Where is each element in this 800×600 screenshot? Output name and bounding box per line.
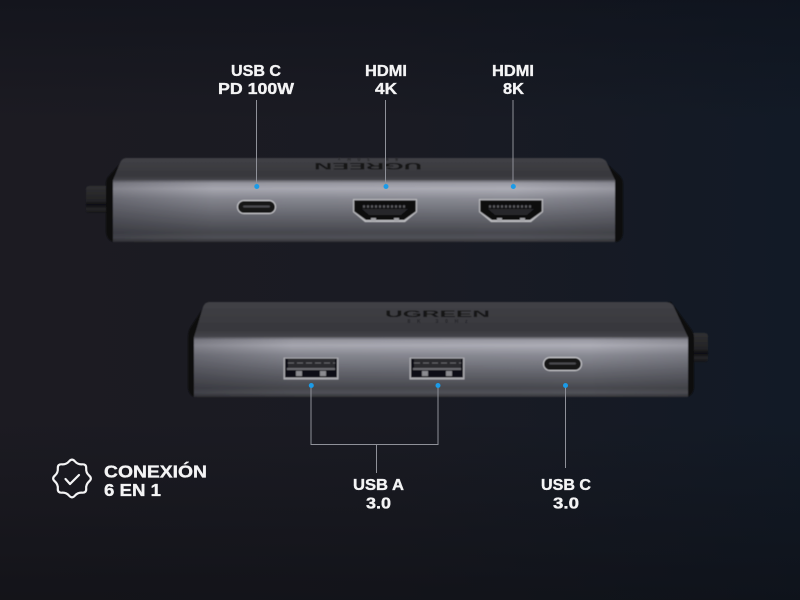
port: USB C 3.0 [544, 358, 582, 370]
callout: HDMI 8K: HDMI [492, 63, 534, 80]
callout: USB C PD 100W [218, 63, 294, 189]
callout: HDMI 4K: 4K [375, 81, 398, 98]
callout: USB C PD 100W: PD 100W [218, 81, 294, 98]
callout: HDMI 8K: 8K [503, 81, 525, 98]
top face: upper hub [113, 158, 615, 180]
port: HDMI 4K [353, 199, 417, 222]
black end cap: lower hub [188, 302, 694, 397]
callout: HDMI 4K [365, 63, 407, 189]
callout: HDMI 8K [492, 63, 534, 189]
logo: upper hub: UGREEN [314, 161, 422, 171]
product: upper hub [86, 155, 623, 242]
callout: USB A 3.0: 3.0 [366, 496, 391, 512]
logo: lower hub: 8K 30Hz [408, 319, 468, 325]
front face: upper hub [113, 180, 615, 242]
logo: lower hub [385, 309, 490, 325]
logo: lower hub: UGREEN [385, 309, 490, 319]
logo: upper hub: 8K 30Hz [338, 155, 398, 161]
callout: USB C 3.0: USB C [541, 477, 591, 494]
port: USB A right [410, 358, 464, 380]
callout: USB C PD 100W: USB C [231, 63, 281, 80]
callout: USB A 3.0: USB A [353, 477, 404, 494]
text: 6 en 1: 6 EN 1 [104, 480, 161, 500]
callout: HDMI 4K: HDMI [365, 63, 407, 80]
callout: USB C 3.0 [541, 383, 591, 512]
icon: verified check [53, 460, 91, 497]
badge: conexión 6 en 1 [53, 460, 207, 500]
port: HDMI 8K [479, 199, 543, 222]
port: USB C PD 100W [238, 200, 276, 214]
top face: lower hub [194, 302, 688, 337]
black end cap: upper hub [106, 158, 623, 242]
cable: lower hub [688, 333, 708, 362]
heading: conexión: CONEXIÓN [104, 460, 207, 482]
callout: USB A 3.0 [309, 383, 440, 512]
callout: USB C 3.0: 3.0 [553, 496, 579, 512]
product: lower hub [188, 302, 708, 397]
port: USB A left [284, 358, 338, 380]
cable: upper hub [86, 186, 110, 213]
logo: upper hub [314, 155, 422, 171]
front face: lower hub [194, 337, 688, 397]
